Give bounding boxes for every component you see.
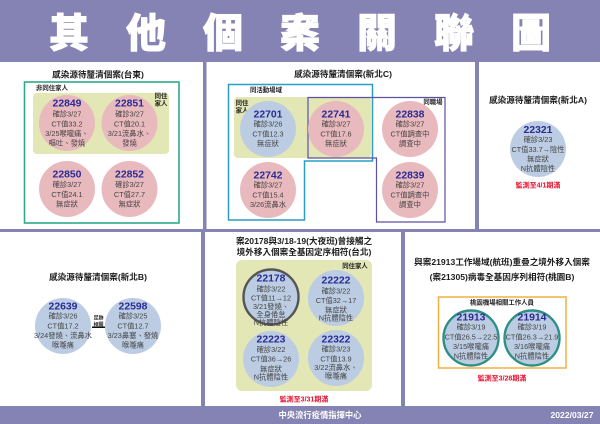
case 22741 bbox=[308, 101, 364, 157]
case 22321: N抗體陰性 bbox=[521, 164, 555, 173]
case 22701: 無症狀 bbox=[257, 139, 280, 148]
case 21913: 確診3/19 bbox=[457, 322, 485, 332]
panel heading line two: 境外移入個案全基因定序相符(台北) bbox=[237, 246, 371, 257]
label: household: 家人 bbox=[236, 106, 249, 114]
case 22222: N抗體陰性 bbox=[319, 314, 353, 322]
case 22598: 確診3/25 bbox=[119, 312, 147, 320]
case 22851: 發燒 bbox=[122, 138, 137, 148]
case 22839: 調查中 bbox=[399, 200, 421, 209]
label: household: 家人 bbox=[155, 98, 168, 108]
panel heading: 感染源待釐清個案(台東) bbox=[52, 68, 144, 80]
title bbox=[49, 1, 551, 59]
case 21913 bbox=[444, 310, 498, 366]
panel heading: 與案21913工作場域(航班)重疊之境外移入個案 bbox=[414, 256, 590, 267]
label: household: 同住家人 bbox=[342, 261, 368, 270]
link: footprint related: 相關 bbox=[93, 321, 104, 328]
case 22178: 全身倦怠 bbox=[256, 310, 286, 319]
case 22852 bbox=[102, 161, 158, 217]
case 22852: 確診3/27 bbox=[115, 180, 144, 189]
label: non-household: 非同住家人 bbox=[36, 83, 69, 92]
case 22178: 確診3/22 bbox=[257, 284, 285, 294]
case 22639: CT值17.2 bbox=[47, 322, 79, 330]
case 22852: 22852 bbox=[115, 170, 144, 180]
case 22850: 確診3/27 bbox=[53, 180, 81, 189]
panel: New Taipei A bbox=[489, 94, 587, 190]
case 22639 bbox=[34, 298, 93, 354]
case 22322: 確診3/23 bbox=[322, 344, 350, 354]
green group frame bbox=[24, 82, 179, 223]
panel: Taipei bbox=[236, 235, 372, 404]
panel: New Taipei B bbox=[34, 271, 161, 354]
case 21913: N抗體陰性 bbox=[454, 352, 488, 360]
case 22639: 22639 bbox=[49, 302, 78, 312]
monitoring note: 監測至3/31期滿 bbox=[280, 394, 328, 404]
case 22742: 確診3/27 bbox=[254, 180, 282, 190]
title: 個 bbox=[203, 1, 243, 59]
label: household: 同住 bbox=[155, 91, 168, 100]
case 22639: 喉嚨痛 bbox=[52, 340, 74, 350]
case 22178: CT值11→12 bbox=[251, 294, 291, 302]
case 22701: 22701 bbox=[254, 110, 283, 120]
yellow household zone bbox=[234, 97, 371, 158]
case 22851 bbox=[102, 95, 158, 151]
case 22849: 嘔吐、發燒 bbox=[49, 138, 86, 148]
link: footprint related bbox=[92, 314, 105, 328]
title: 關 bbox=[357, 1, 397, 59]
case 22322: 喉嚨痛 bbox=[325, 372, 347, 380]
case 22838: 確診3/27 bbox=[396, 120, 424, 128]
case 22322: 3/22流鼻水、 bbox=[314, 363, 358, 372]
case 22742: 22742 bbox=[254, 170, 283, 182]
case 22639: 3/24發燒、流鼻水 bbox=[34, 331, 93, 340]
case 22639: 確診3/26 bbox=[49, 312, 77, 320]
case 22178: N抗體陰性 bbox=[254, 318, 288, 327]
panel heading: 感染源待釐清個案(新北A) bbox=[489, 94, 587, 105]
case 22850 bbox=[39, 161, 95, 217]
title: 圖 bbox=[511, 1, 551, 59]
title: 聯 bbox=[434, 1, 474, 59]
case 21914: N抗體陰性 bbox=[515, 352, 549, 360]
case 22321: 無症狀 bbox=[527, 154, 550, 164]
case 22851: CT值20.1 bbox=[114, 120, 145, 128]
case 22598: 3/23鼻塞、發燒 bbox=[108, 331, 159, 340]
case 22598: 22598 bbox=[119, 302, 148, 312]
case 22322: 22322 bbox=[322, 334, 351, 346]
case 22839: CT值調查中 bbox=[391, 190, 429, 200]
case 22839: 22839 bbox=[396, 170, 425, 182]
label: household: 同住 bbox=[236, 98, 249, 107]
case 22849: 22849 bbox=[53, 98, 82, 110]
panel: Taoyuan bbox=[414, 256, 590, 382]
panel heading: 感染源待釐清個案(新北C) bbox=[294, 68, 392, 79]
case 22321: 確診3/23 bbox=[524, 135, 552, 144]
case 22838: 22838 bbox=[396, 110, 425, 120]
case 22839: 確診3/27 bbox=[396, 180, 424, 190]
orange group frame bbox=[438, 297, 566, 368]
case 22850: 無症狀 bbox=[56, 200, 79, 208]
case 22850: CT值24.1 bbox=[51, 190, 83, 199]
case 22742 bbox=[240, 162, 296, 218]
case 22838 bbox=[382, 101, 438, 157]
case 21914: CT值26.3→21.9 bbox=[506, 332, 558, 342]
case 22222: 無症狀 bbox=[325, 306, 348, 314]
case 21913: CT值26.5→22.5 bbox=[445, 332, 497, 342]
case 22741: 無症狀 bbox=[325, 139, 348, 148]
case 21913: 3/15喉嚨痛 bbox=[453, 342, 489, 351]
panel heading: 案20178與3/18-19(大夜班)曾接觸之 bbox=[236, 235, 372, 246]
case 22849: 3/25喉嚨痛、 bbox=[45, 129, 89, 138]
case 22598: CT值12.7 bbox=[117, 322, 149, 330]
teal shared-activity frame bbox=[228, 84, 372, 220]
case 21914: 3/16喉嚨痛 bbox=[514, 342, 550, 351]
case 22321: 22321 bbox=[524, 125, 553, 136]
case 22223: CT值36→26 bbox=[251, 354, 291, 364]
case 22701 bbox=[240, 101, 296, 157]
case 22741: 22741 bbox=[322, 110, 351, 120]
footer date: 2022/03/27 bbox=[550, 410, 594, 420]
link: footprint related: 足跡 bbox=[93, 314, 104, 322]
case 21914: 21914 bbox=[518, 312, 547, 324]
case 22742: 3/26流鼻水 bbox=[250, 200, 287, 209]
case 22178: 22178 bbox=[257, 274, 286, 284]
label: same workplace: 同職場 bbox=[423, 97, 443, 106]
case 22178 bbox=[244, 270, 298, 327]
case 22223: N抗體陰性 bbox=[254, 372, 288, 382]
case 22222 bbox=[308, 270, 364, 326]
panel heading line two: (案21305)病毒全基因序列相符(桃園B) bbox=[430, 271, 574, 282]
header band bbox=[0, 0, 600, 62]
case 22741: 確診3/27 bbox=[322, 120, 350, 128]
case 22852: CT值27.7 bbox=[114, 190, 145, 199]
case 22851: 確診3/27 bbox=[115, 110, 144, 118]
case 22223: 無症狀 bbox=[260, 364, 283, 374]
title: 他 bbox=[126, 1, 166, 59]
label: airport staff: 桃園機場相關工作人員 bbox=[470, 298, 535, 306]
footer organisation: 中央流行疫情指揮中心 bbox=[279, 410, 362, 420]
case 22222: CT值32→17 bbox=[316, 296, 356, 305]
case 21914: 確診3/19 bbox=[518, 322, 546, 332]
case 21913: 21913 bbox=[457, 312, 486, 324]
case 22850: 22850 bbox=[53, 170, 82, 180]
yellow household zone bbox=[33, 93, 169, 154]
case 22321 bbox=[510, 121, 566, 177]
case 22851: 22851 bbox=[115, 98, 144, 110]
case 22838: 調查中 bbox=[399, 139, 421, 148]
case 22849: 確診3/27 bbox=[53, 110, 81, 118]
case 22222: 22222 bbox=[322, 276, 351, 286]
case 22598 bbox=[105, 298, 161, 354]
panel heading: 感染源待釐清個案(新北B) bbox=[49, 271, 147, 282]
case 22178: 3/21發燒、 bbox=[253, 302, 289, 311]
footer band bbox=[0, 406, 600, 424]
case 22741: CT值17.6 bbox=[320, 130, 352, 138]
case 22222: 確診3/22 bbox=[322, 286, 350, 296]
purple shared-workplace frame bbox=[308, 98, 445, 222]
case 22322: CT值13.9 bbox=[320, 354, 352, 364]
case 22223: 22223 bbox=[257, 334, 286, 346]
case 22701: 確診3/26 bbox=[254, 120, 282, 128]
case 22321: CT值33.7→陰性 bbox=[511, 145, 565, 154]
case 22849 bbox=[39, 95, 95, 151]
case 22852: 無症狀 bbox=[119, 200, 141, 208]
case 22223: 確診3/22 bbox=[257, 345, 285, 354]
panel: New Taipei C bbox=[228, 68, 445, 222]
case 22849: CT值33.2 bbox=[51, 120, 83, 128]
panel: Taitung bbox=[24, 68, 179, 223]
case 22598: 喉嚨痛 bbox=[122, 340, 144, 350]
case 21914 bbox=[504, 310, 560, 366]
monitoring note: 監測至4/1期滿 bbox=[516, 180, 560, 190]
label: shared activity area: 同活動場域 bbox=[250, 85, 283, 94]
title: 案 bbox=[280, 1, 320, 59]
case 22223 bbox=[243, 331, 299, 387]
case 22701: CT值12.3 bbox=[252, 130, 284, 138]
monitoring note: 監測至3/28期滿 bbox=[478, 374, 526, 382]
case 22839 bbox=[382, 162, 438, 218]
case 22838: CT值調查中 bbox=[391, 130, 429, 138]
yellow household zone bbox=[236, 260, 372, 391]
case 22322 bbox=[308, 330, 364, 386]
case 22742: CT值15.4 bbox=[252, 190, 284, 200]
case 22851: 3/21流鼻水、 bbox=[108, 129, 151, 138]
title: 其 bbox=[49, 1, 89, 59]
